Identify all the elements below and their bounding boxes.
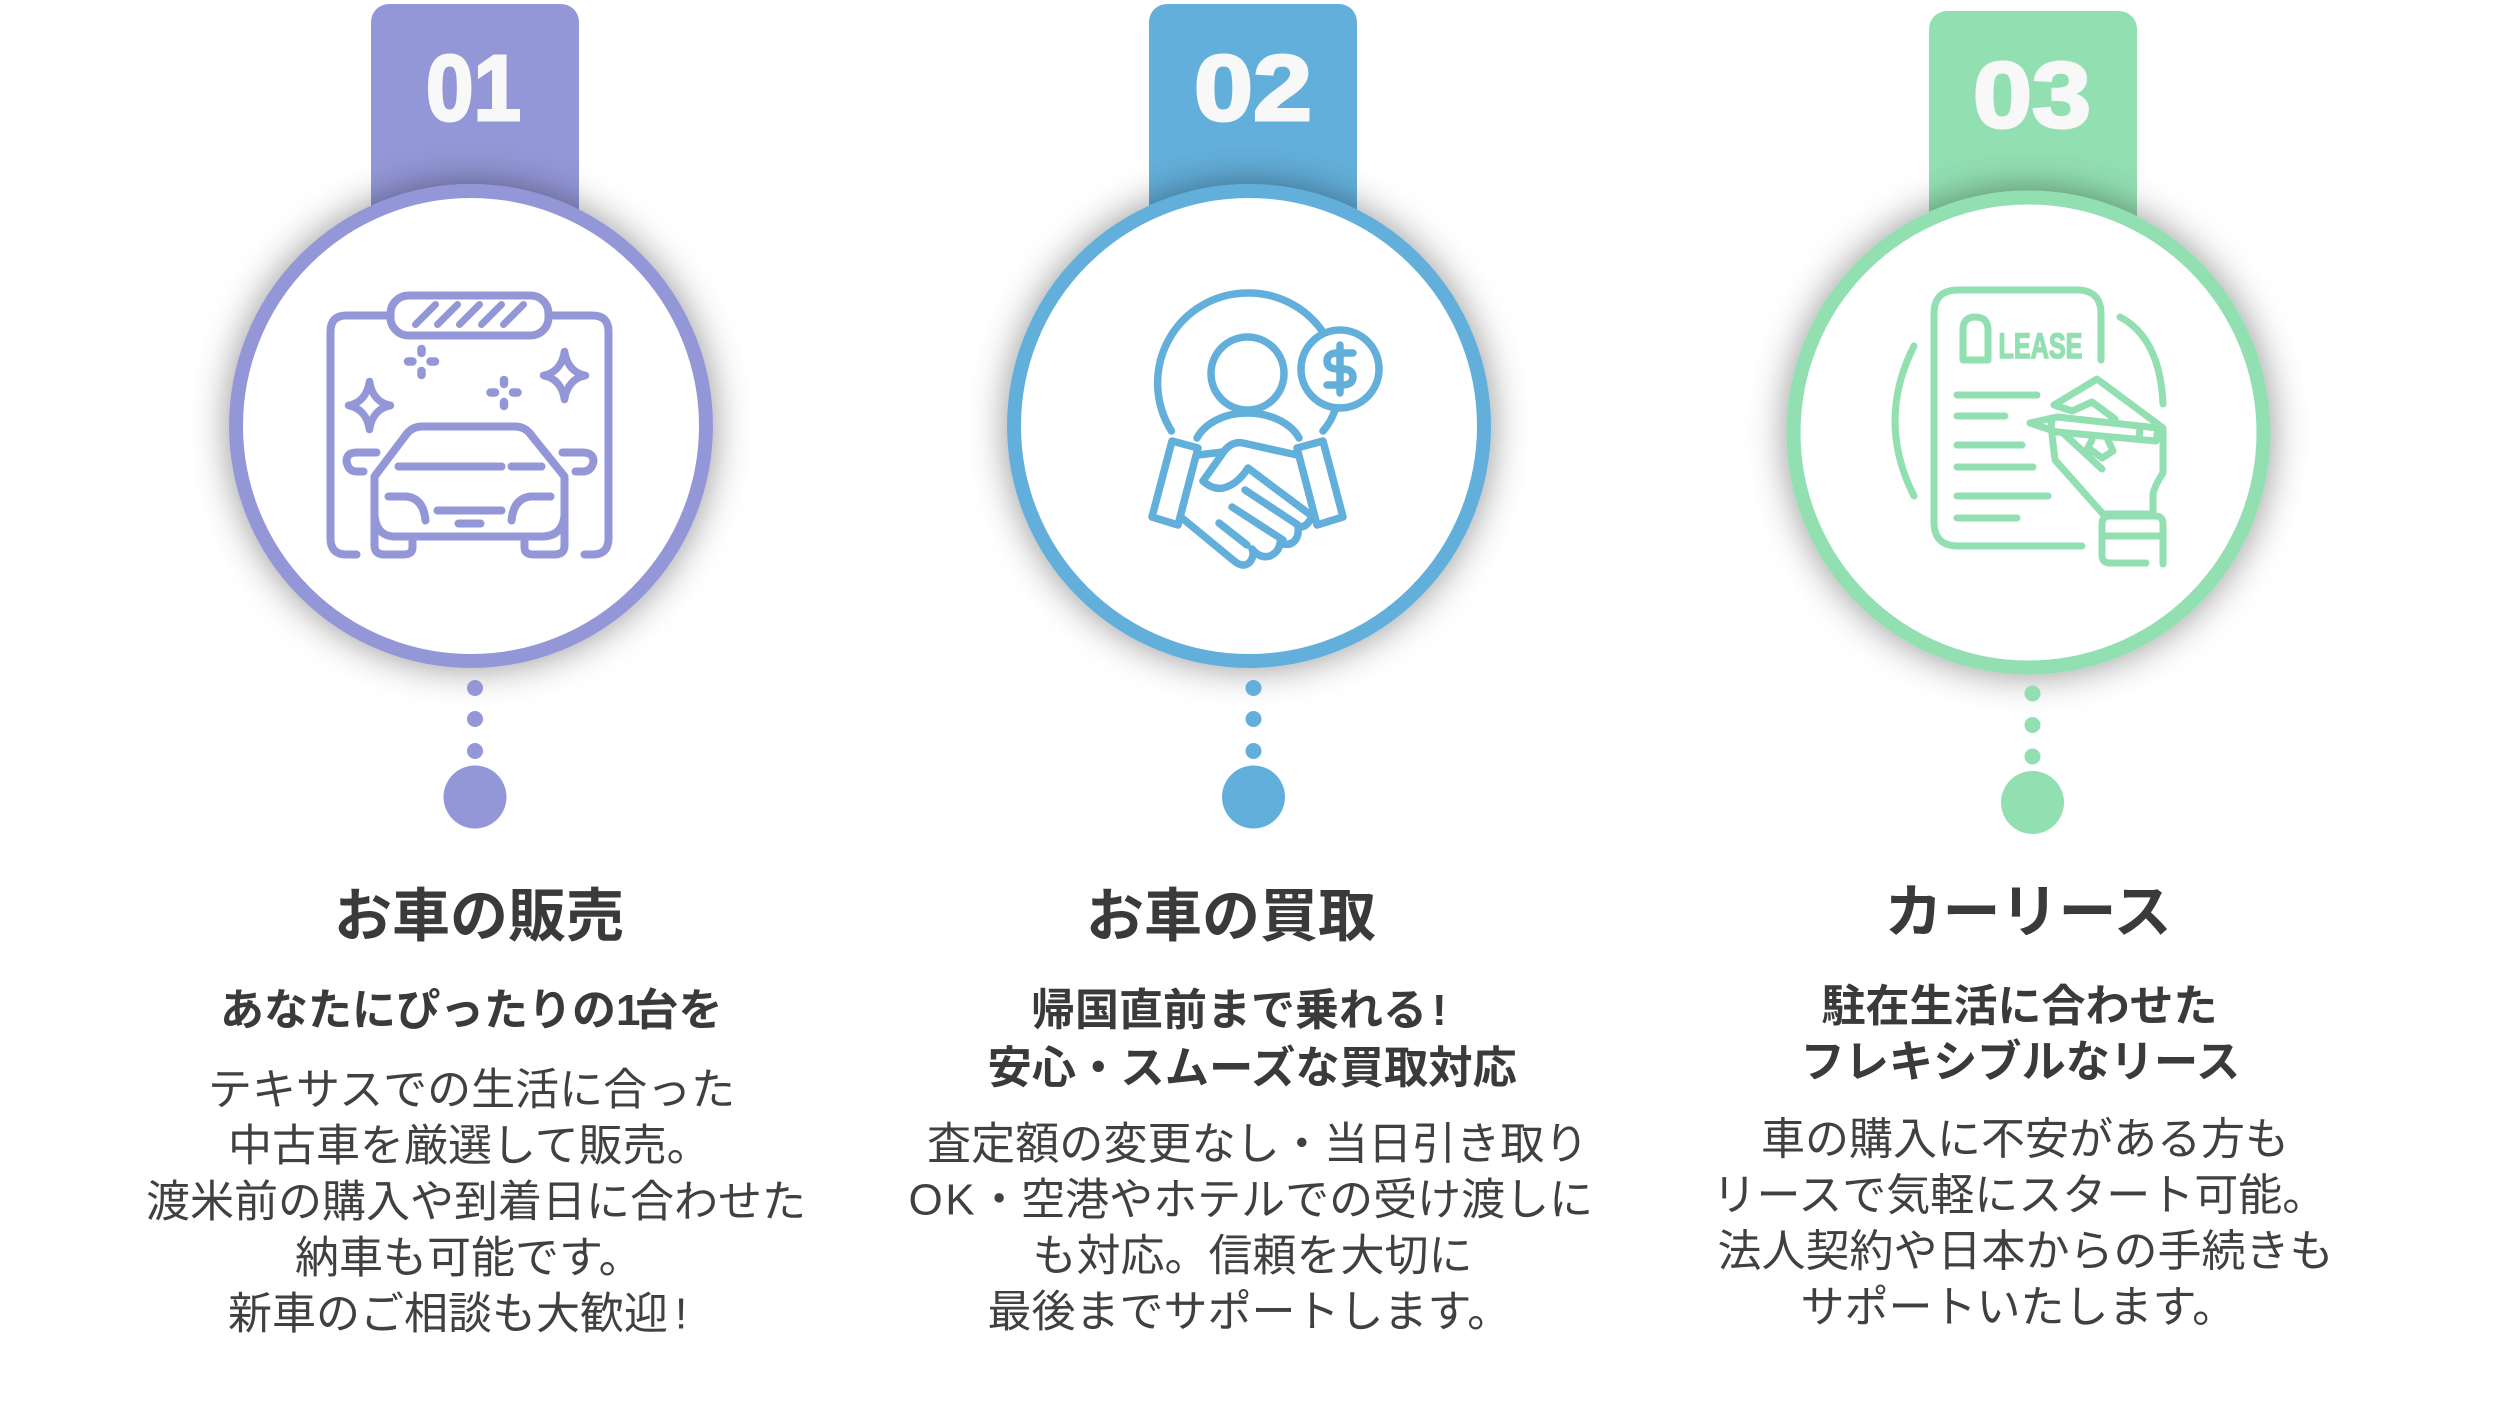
number tab 02: 02: [1194, 36, 1312, 140]
body text: 法人契約や日本からの手続きも: [1718, 1227, 2334, 1276]
number tab 01: 01: [426, 36, 521, 140]
body text: OK・空港やホテルでの受け渡しに: [908, 1176, 1593, 1224]
subheading: フレキシブルなリース: [1800, 1038, 2240, 1087]
body text: [146, 1066, 806, 1338]
heading: カーリース: [1884, 880, 2172, 945]
connector dots: [2001, 686, 2064, 834]
icon label: LEASE: LEASE: [1998, 327, 2082, 366]
icon: lease document: [1895, 290, 2163, 564]
body text: 車の購入に不安がある方も: [1761, 1115, 2289, 1164]
subheading: 安心・スムーズな買取対応: [988, 1044, 1517, 1093]
body text: 渡米前の購入や到着日に合わせた: [146, 1178, 806, 1226]
body text: サポートいたします。: [1800, 1283, 2236, 1332]
subheading: [1800, 982, 2240, 1087]
body text: 最後までサポートします。: [988, 1288, 1511, 1336]
circle ring: [236, 191, 706, 661]
body text: 中古車を厳選して販売。: [228, 1122, 711, 1170]
number tab 02: [1149, 4, 1357, 264]
body text: も対応。信頼を大切に: [1032, 1232, 1472, 1280]
heading: お車の買取: [1086, 884, 1376, 949]
body text: リースで気軽にスタート可能。: [1712, 1171, 2326, 1220]
subheading: 駐在生活に合わせた: [1822, 982, 2218, 1031]
panel: car buying: [908, 4, 1593, 1336]
connector dots: [1222, 680, 1285, 828]
body text: [908, 1120, 1593, 1336]
icon: handshake with dollar: [1152, 293, 1379, 565]
body text: 査定額の変更なし・当日引き取り: [927, 1120, 1588, 1169]
circle ring: [1014, 191, 1484, 661]
body text: [1712, 1115, 2334, 1332]
heading: お車の販売: [334, 884, 624, 949]
panel: car sales: [146, 4, 806, 1338]
number tab 03: 03: [1973, 43, 2091, 147]
subheading: あなたにぴったりの1台を: [220, 986, 722, 1035]
circle ring: [1794, 198, 2264, 668]
body text: テキサスでの生活に合った: [208, 1066, 735, 1114]
body text: 新車のご相談も大歓迎!: [228, 1290, 687, 1338]
subheading: 帰国直前まで乗れる!: [1031, 986, 1447, 1035]
number tab 03: [1929, 11, 2137, 271]
subheading: [988, 986, 1517, 1093]
icon: car wash: [330, 296, 608, 554]
panel: car lease: [1712, 11, 2334, 1332]
number tab 01: [371, 4, 579, 264]
connector dots: [444, 680, 506, 828]
body text: 納車も可能です。: [295, 1234, 643, 1282]
